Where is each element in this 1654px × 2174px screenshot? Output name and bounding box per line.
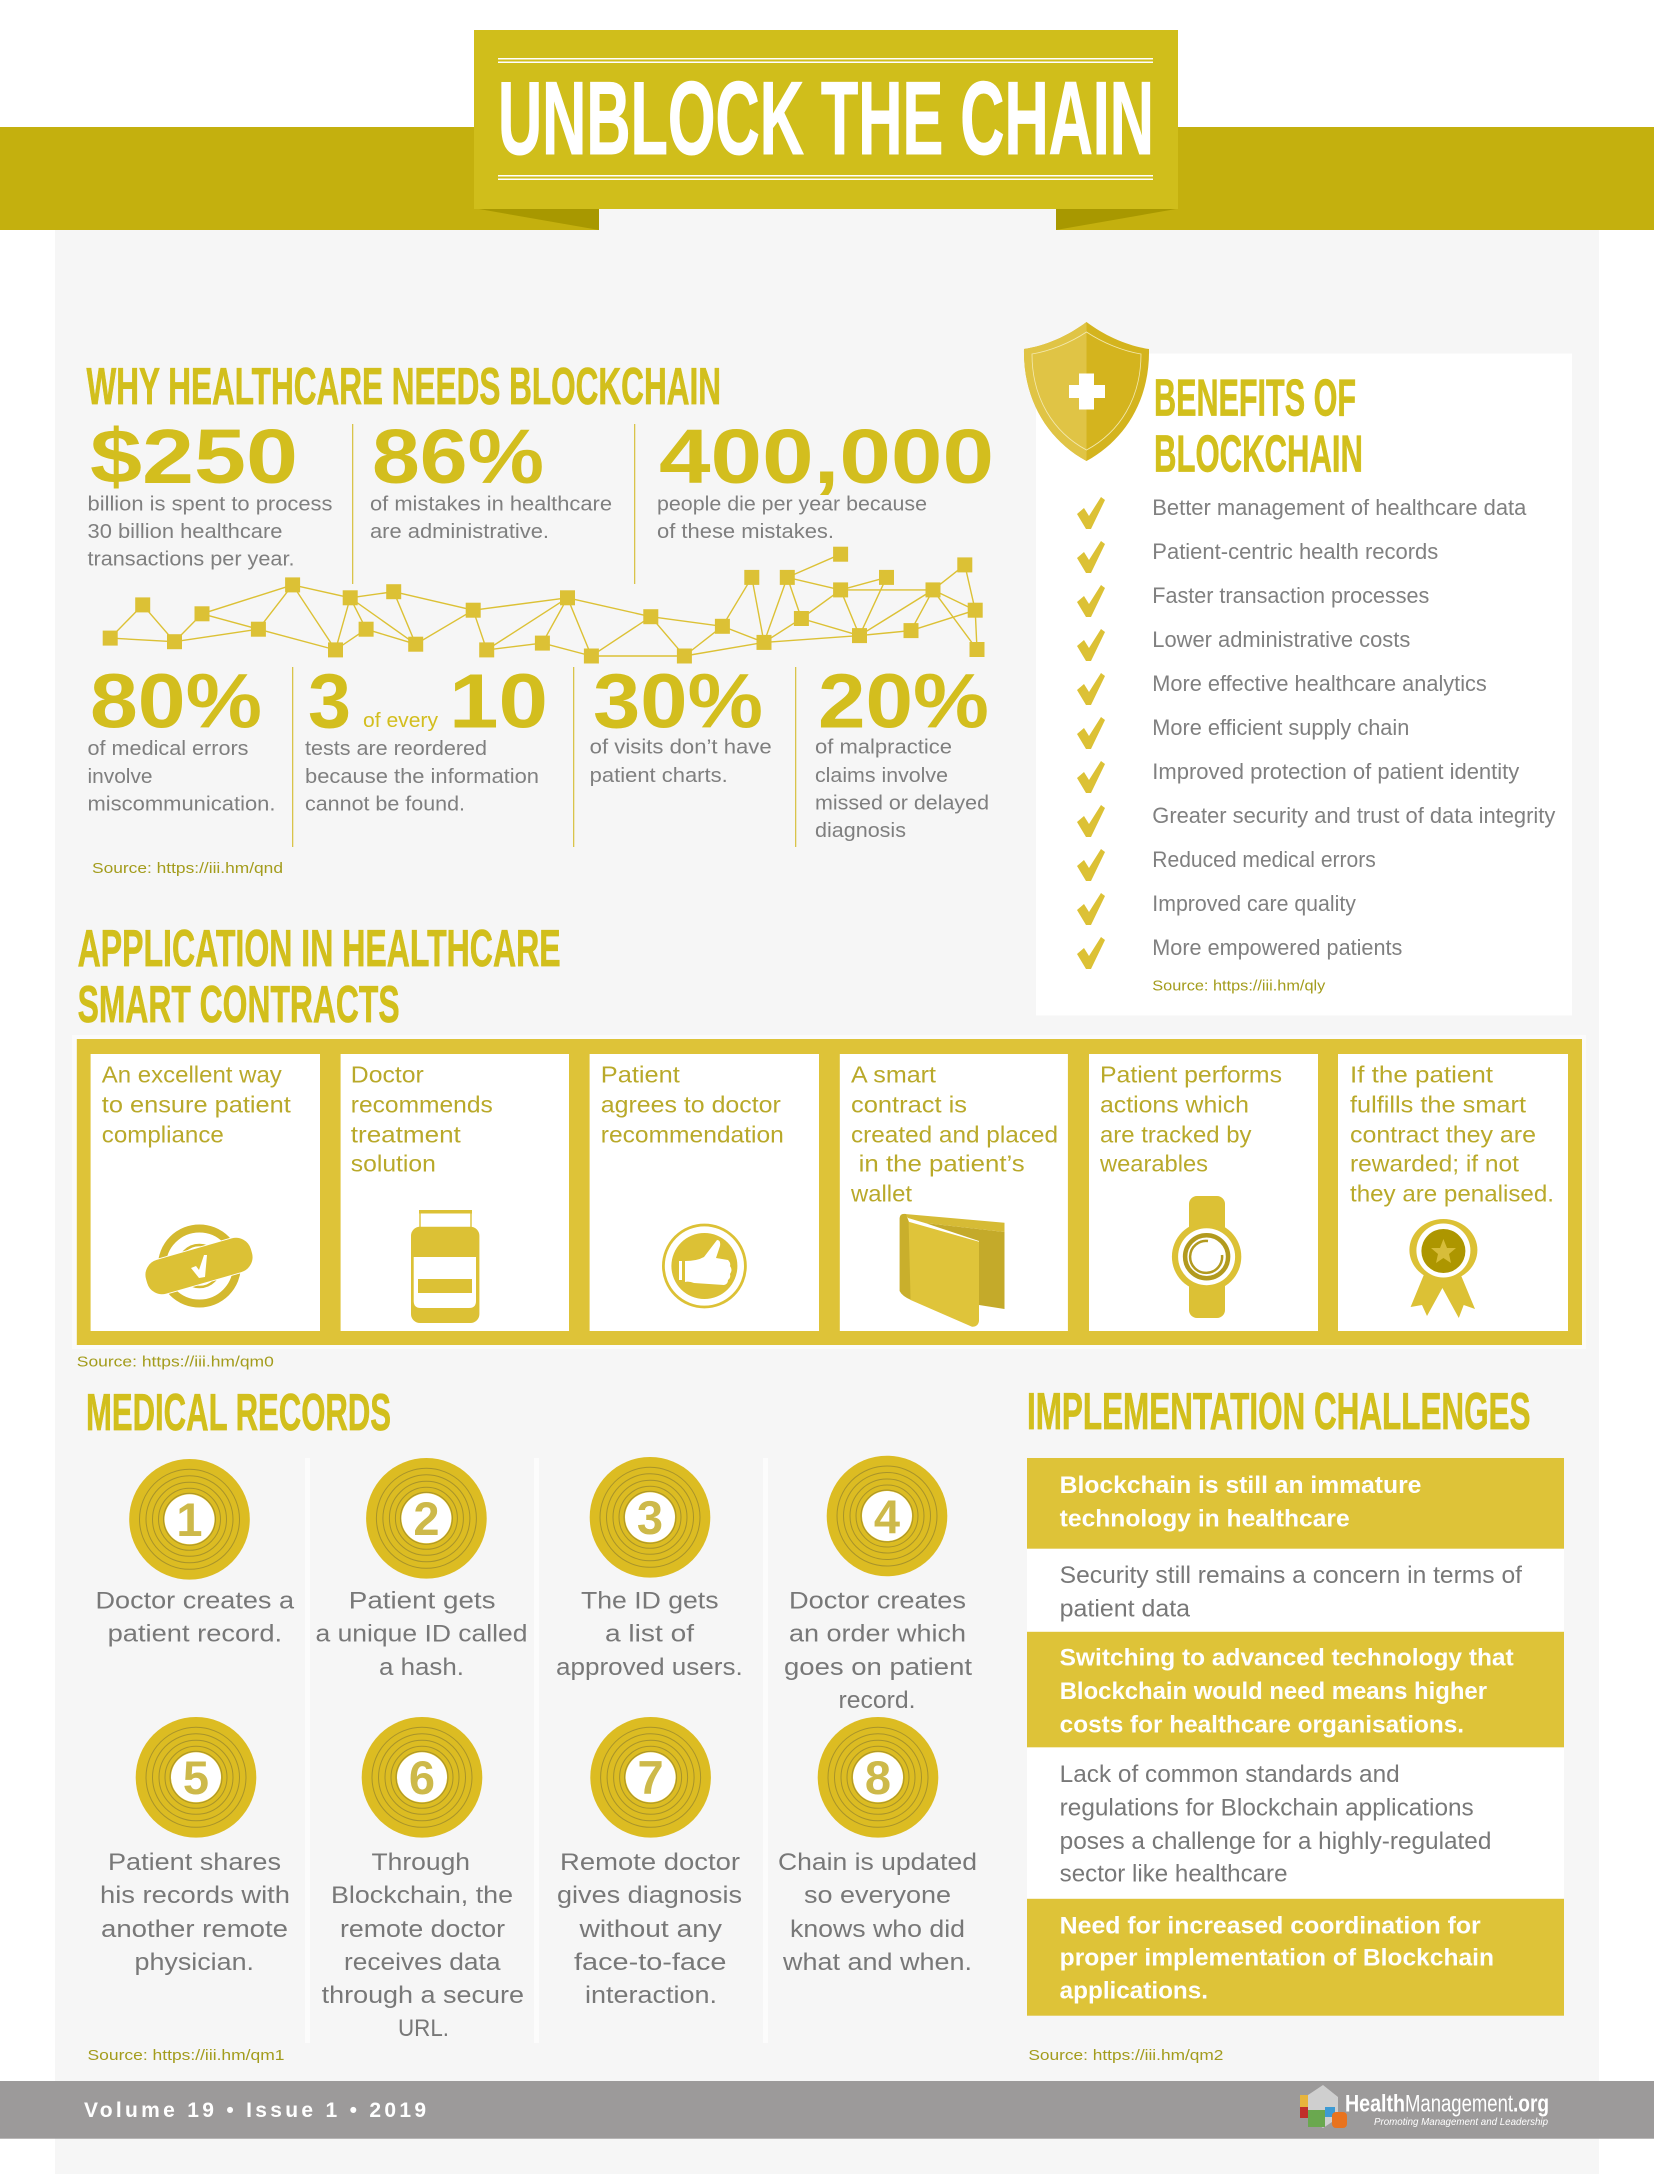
- challenge 2: patient data: [1060, 1596, 1191, 1623]
- step 2: a unique ID called: [316, 1621, 528, 1648]
- challenge 2: Security still remains a concern in terms of: [1060, 1562, 1522, 1589]
- card 3: Patient: [601, 1062, 680, 1088]
- stat: 30%: of visits don’t have: [590, 736, 772, 759]
- stat: 20%: of malpractice: [815, 736, 952, 759]
- stat: $250: $250: [90, 414, 298, 500]
- source: Source: https://iii.hm/qm2: [1028, 2047, 1223, 2064]
- stat: 30%: 30%: [593, 658, 763, 744]
- stat: 86%: are administrative.: [370, 520, 549, 543]
- step 5: Patient shares: [108, 1849, 281, 1876]
- step 8: what and when.: [782, 1949, 972, 1976]
- card 5: Patient performs: [1100, 1062, 1282, 1088]
- step 4: an order which: [789, 1621, 966, 1648]
- stat: $250: [88, 414, 332, 571]
- panel: benefits of blockchain: [1024, 322, 1572, 1016]
- card 2: [341, 1054, 569, 1331]
- card 5: actions which: [1100, 1092, 1249, 1118]
- step 7: face-to-face: [574, 1949, 726, 1976]
- step 6: remote doctor: [340, 1916, 505, 1943]
- card 6: [1338, 1054, 1568, 1331]
- card 6: fulfills the smart: [1350, 1092, 1527, 1118]
- stat: 86%: [370, 414, 612, 543]
- icon: award ribbon: [1409, 1219, 1477, 1318]
- card 3: recommendation: [601, 1122, 784, 1148]
- benefits list: More efficient supply chain: [1152, 715, 1409, 740]
- challenge 5: [1027, 1899, 1564, 2016]
- benefits list: Better management of healthcare data: [1152, 495, 1527, 520]
- icons: check marks: [1077, 497, 1105, 969]
- step 1: 1: [176, 1493, 203, 1546]
- step 7: gives diagnosis: [557, 1882, 742, 1909]
- step 4: [784, 1456, 972, 1714]
- card 5: are tracked by: [1100, 1122, 1252, 1148]
- heading: MEDICAL RECORDS: [86, 1384, 391, 1442]
- challenge 3: costs for healthcare organisations.: [1060, 1712, 1464, 1739]
- step 7: [557, 1717, 742, 2009]
- step 6: URL.: [398, 2015, 449, 2042]
- step 8: Chain is updated: [778, 1849, 977, 1876]
- stat: $250: 30 billion healthcare: [88, 520, 282, 543]
- card 2: solution: [351, 1151, 436, 1177]
- heading: application in healthcare smart contracts: [78, 920, 561, 1034]
- card 4: A smart: [851, 1062, 937, 1088]
- source: Source: https://iii.hm/qm0: [77, 1354, 274, 1371]
- card 2: Doctor: [351, 1062, 424, 1088]
- step 5: [100, 1717, 290, 1976]
- icon: watch: [1172, 1196, 1241, 1318]
- step 4: Doctor creates: [789, 1587, 966, 1614]
- logo: healthmanagement.org: [1300, 2085, 1549, 2128]
- challenge 4: regulations for Blockchain applications: [1060, 1794, 1474, 1821]
- stat: 80%: miscommunication.: [88, 793, 276, 816]
- challenge 1: Blockchain is still an immature: [1060, 1472, 1421, 1499]
- panel: smart contracts: [72, 1035, 1586, 1349]
- footer bar: [0, 2081, 1654, 2139]
- stat: 20%: claims involve: [815, 764, 948, 787]
- stat: 400,000: 400,000: [659, 414, 994, 500]
- step 1: patient record.: [108, 1621, 282, 1648]
- stat: 400,000: of these mistakes.: [657, 520, 834, 543]
- stat: 30%: [590, 658, 772, 787]
- challenge 5: applications.: [1060, 1977, 1208, 2004]
- challenge 3: Switching to advanced technology that: [1060, 1645, 1514, 1672]
- icon: wallet: [900, 1214, 1004, 1327]
- step 2: a hash.: [379, 1654, 464, 1681]
- stat: 20%: missed or delayed: [815, 792, 989, 815]
- step 7: Remote doctor: [560, 1849, 740, 1876]
- challenge 5: proper implementation of Blockchain: [1060, 1945, 1494, 1972]
- issue line: Volume 19 • Issue 1 • 2019: [84, 2099, 426, 2122]
- step 2: 2: [413, 1492, 439, 1545]
- card 4: wallet: [850, 1181, 913, 1207]
- benefits list: Lower administrative costs: [1152, 627, 1410, 652]
- step 7: 7: [638, 1751, 664, 1804]
- icon: pill bottle: [411, 1210, 479, 1323]
- step 4: 4: [874, 1490, 900, 1543]
- step 7: interaction.: [585, 1982, 717, 2009]
- logo: healthmanagement.org: Promoting Management and Leadership: [1374, 2116, 1548, 2128]
- benefits list: Improved care quality: [1152, 891, 1357, 916]
- stat: 3 of every 10: cannot be found.: [305, 793, 465, 816]
- step 1: [96, 1459, 295, 1648]
- card 6: rewarded; if not: [1350, 1151, 1520, 1177]
- stat: 20%: 20%: [818, 658, 989, 744]
- stat: 3 of every 10: [305, 658, 548, 816]
- card 2: treatment: [351, 1122, 461, 1148]
- heading: BLOCKCHAIN: [1154, 425, 1363, 483]
- card 1: compliance: [102, 1122, 224, 1148]
- stat: 20%: diagnosis: [815, 819, 906, 842]
- step 3: The ID gets: [581, 1587, 718, 1614]
- card 3: [590, 1054, 819, 1331]
- step 3: a list of: [605, 1621, 694, 1648]
- step 3: [556, 1457, 743, 1681]
- step 5: his records with: [100, 1882, 290, 1909]
- logo: healthmanagement.org: .org: [1513, 2091, 1549, 2118]
- stat: 3 of every 10: tests are reordered: [305, 737, 487, 760]
- step 8: 8: [865, 1751, 891, 1804]
- card 6: contract they are: [1350, 1122, 1536, 1148]
- benefits list: Improved protection of patient identity: [1152, 759, 1520, 784]
- step 7: without any: [578, 1916, 722, 1943]
- stat: 3 of every 10: of every: [363, 710, 438, 732]
- card 4: created and placed: [851, 1122, 1058, 1148]
- step 6: Through: [372, 1849, 470, 1876]
- step 8: so everyone: [804, 1882, 951, 1909]
- card 3: agrees to doctor: [601, 1092, 781, 1118]
- source: Source: https://iii.hm/qly: [1152, 977, 1326, 994]
- step 5: 5: [183, 1751, 209, 1804]
- stat: 86%: 86%: [372, 414, 544, 500]
- stat: 400,000: [657, 414, 994, 543]
- step 4: goes on patient: [784, 1654, 972, 1681]
- heading: application in healthcare smart contracts: SMART CONTRACTS: [78, 976, 400, 1034]
- stat: 86%: of mistakes in healthcare: [370, 493, 612, 516]
- challenge 4: Lack of common standards and: [1060, 1761, 1400, 1788]
- step 5: physician.: [134, 1949, 254, 1976]
- heading: [1154, 370, 1363, 483]
- stat: 3 of every 10: 10: [449, 658, 548, 744]
- card 6: If the patient: [1350, 1062, 1494, 1088]
- stat: 3 of every 10: because the information: [305, 765, 539, 788]
- step 8: [778, 1717, 977, 1976]
- source: Source: https://iii.hm/qnd: [92, 860, 283, 877]
- step 5: another remote: [101, 1916, 288, 1943]
- card 4: contract is: [851, 1092, 967, 1118]
- title: UNBLOCK THE CHAIN: [498, 61, 1154, 177]
- challenge 3: [1027, 1632, 1564, 1747]
- icon: shield: [1024, 322, 1149, 461]
- benefits list: More empowered patients: [1152, 935, 1402, 960]
- challenge 4: poses a challenge for a highly-regulated: [1060, 1828, 1491, 1855]
- stat: 400,000: people die per year because: [657, 493, 927, 516]
- challenge 4: sector like healthcare: [1060, 1860, 1288, 1887]
- stat: 20%: [815, 658, 989, 842]
- challenge 2: [1027, 1549, 1564, 1632]
- benefits list: Faster transaction processes: [1152, 583, 1429, 608]
- benefits list: More effective healthcare analytics: [1152, 671, 1487, 696]
- step 3: approved users.: [556, 1654, 743, 1681]
- card 2: recommends: [351, 1092, 493, 1118]
- card 5: wearables: [1099, 1151, 1208, 1177]
- step 3: 3: [637, 1491, 663, 1544]
- step 2: [316, 1458, 528, 1681]
- challenge 1: [1027, 1458, 1564, 1549]
- card 1: [91, 1054, 320, 1331]
- step 6: 6: [409, 1751, 435, 1804]
- icon: bandage: [141, 1228, 257, 1304]
- challenge 3: Blockchain would need means higher: [1060, 1678, 1487, 1705]
- stat: $250: billion is spent to process: [88, 493, 332, 516]
- icon: thumbs up: [663, 1225, 745, 1307]
- benefits list: Patient-centric health records: [1152, 539, 1438, 564]
- stat: 30%: patient charts.: [590, 764, 728, 787]
- logo: healthmanagement.org: Management: [1405, 2091, 1513, 2118]
- source: Source: https://iii.hm/qm1: [88, 2047, 284, 2064]
- panel: implementation challenges: [1027, 1383, 1564, 2064]
- step 6: [322, 1717, 524, 2042]
- stat: 80%: of medical errors: [88, 737, 248, 760]
- title banner: [474, 30, 1178, 230]
- stat: $250: transactions per year.: [88, 548, 294, 571]
- network chain graphic: [103, 547, 984, 664]
- card 5: [1089, 1054, 1318, 1331]
- step 6: receives data: [344, 1949, 501, 1976]
- challenge 1: technology in healthcare: [1060, 1505, 1350, 1532]
- step 8: knows who did: [790, 1916, 965, 1943]
- step 6: through a secure: [322, 1982, 524, 2009]
- panel: why healthcare needs blockchain: [86, 358, 994, 877]
- logo: healthmanagement.org: Health: [1345, 2091, 1405, 2118]
- card 4: [840, 1054, 1068, 1331]
- stat: 3 of every 10: 3: [308, 658, 351, 744]
- challenge 5: Need for increased coordination for: [1060, 1913, 1481, 1940]
- benefits list: Greater security and trust of data integrity: [1152, 803, 1556, 828]
- card 1: An excellent way: [102, 1062, 282, 1088]
- card 1: to ensure patient: [102, 1092, 291, 1118]
- heading: BENEFITS OF: [1154, 370, 1356, 428]
- step 2: Patient gets: [349, 1587, 496, 1614]
- panel: medical records: [86, 1384, 977, 2064]
- card 4: in the patient’s: [859, 1151, 1025, 1177]
- stat: 80%: 80%: [90, 658, 262, 744]
- stat: 80%: involve: [88, 765, 152, 788]
- step 4: record.: [838, 1687, 916, 1714]
- benefits list: Reduced medical errors: [1152, 847, 1376, 872]
- header band: [0, 127, 1654, 230]
- heading: application in healthcare smart contracts: APPLICATION IN HEALTHCARE: [78, 920, 561, 978]
- step 6: Blockchain, the: [331, 1882, 513, 1909]
- stat: 80%: [88, 658, 276, 816]
- heading: WHY HEALTHCARE NEEDS BLOCKCHAIN: [86, 358, 721, 416]
- step 1: Doctor creates a: [96, 1587, 295, 1614]
- card 6: they are penalised.: [1350, 1181, 1554, 1207]
- benefits list: [1152, 495, 1556, 960]
- challenge 4: [1027, 1747, 1564, 1899]
